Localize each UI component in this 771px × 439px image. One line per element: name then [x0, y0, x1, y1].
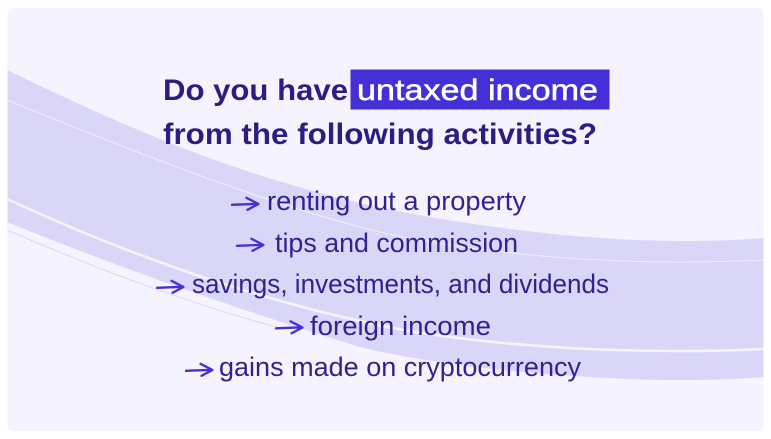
item: foreign income: foreign income	[310, 311, 491, 341]
icon: arrow	[237, 239, 264, 251]
icon: arrow	[276, 321, 302, 333]
title	[163, 70, 610, 151]
item: tips and commission: tips and commission	[275, 228, 518, 258]
item: renting out a property: renting out a property	[267, 186, 526, 216]
title line 1: Do you have	[163, 74, 348, 107]
list of activities	[157, 186, 609, 382]
highlight box	[350, 70, 610, 110]
title line 2: from the following activities?	[163, 118, 597, 151]
swoosh band graphic	[7, 70, 764, 380]
highlighted words: untaxed income	[357, 74, 598, 107]
item: gains made on cryptocurrency: gains made on cryptocurrency	[219, 352, 581, 382]
icon: arrow	[186, 364, 212, 376]
icon: arrow	[232, 198, 258, 210]
icon: arrow	[157, 281, 184, 293]
item: savings, investments, and dividends: savings, investments, and dividends	[192, 269, 609, 299]
